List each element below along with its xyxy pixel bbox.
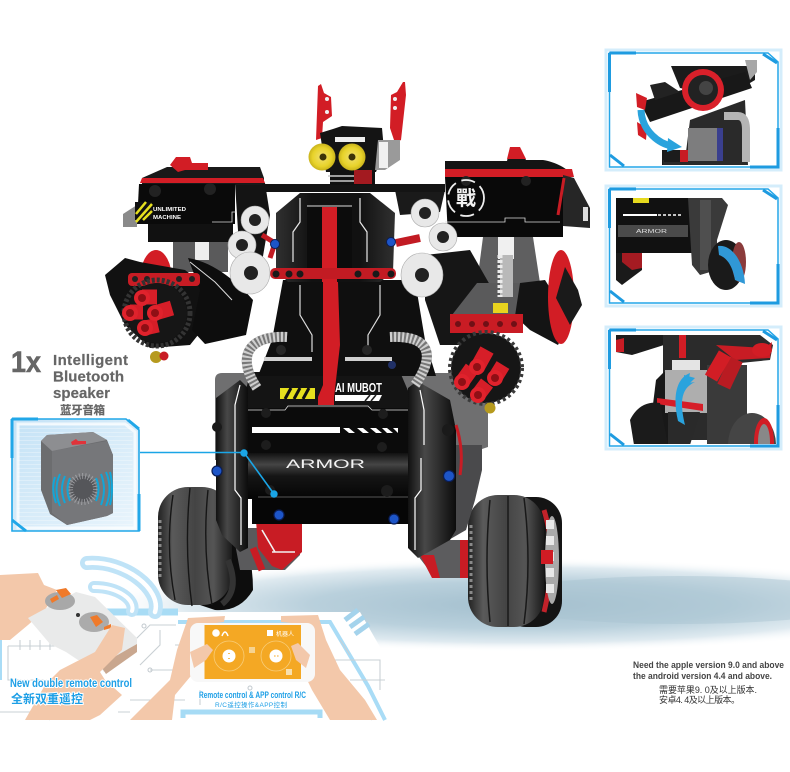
callout line	[140, 450, 277, 497]
text: AI MUBOT: AI MUBOT	[335, 381, 382, 395]
right hand	[281, 615, 377, 720]
yellow eyes	[308, 144, 366, 170]
robot body	[215, 372, 488, 578]
grey rear plate	[215, 373, 488, 460]
left arm gun	[105, 242, 253, 363]
red barrels	[130, 297, 172, 328]
text: new double remote control: 全新双重遥控	[11, 691, 83, 706]
hazard stripes	[280, 388, 315, 399]
lower hand	[25, 625, 125, 720]
underside mechanism right	[415, 540, 468, 578]
text: Intelligent Bluetooth speaker: Intelligent	[53, 352, 128, 369]
corrugated hoses	[247, 337, 427, 388]
text: remote control and app control: Remote control & APP control R/C	[199, 690, 306, 701]
text: new double remote control	[10, 676, 132, 706]
arrow	[675, 373, 695, 425]
icon: wifi arcs	[87, 563, 156, 612]
text: Intelligent Bluetooth speaker: speaker	[53, 385, 110, 402]
lower torso	[258, 280, 436, 376]
text: UNLIMITED MACHINE: MACHINE	[153, 215, 181, 221]
text: Intelligent Bluetooth speaker: 蓝牙音箱	[60, 403, 105, 417]
thumbs	[190, 644, 213, 668]
screen	[204, 625, 301, 679]
emblem: 戰	[456, 187, 476, 210]
text: version requirements: 需要苹果9. 0及以上版本.	[659, 684, 757, 695]
circuit board background	[0, 610, 392, 720]
left shoulder	[123, 157, 270, 262]
text: Intelligent Bluetooth speaker: Bluetooth	[53, 368, 124, 386]
text: UNLIMITED MACHINE	[153, 207, 186, 221]
icon: remote control in hands	[0, 573, 137, 720]
text: 1x label: 1x	[11, 346, 41, 379]
panel: speaker callout	[12, 419, 139, 531]
panel: detail middle	[606, 186, 781, 306]
right wheel	[468, 495, 562, 627]
text: version requirements: 安卓4. 4及以上版本。	[659, 694, 740, 705]
head with horns	[308, 82, 406, 185]
left hand	[130, 616, 225, 720]
red barrels	[462, 350, 503, 395]
underside mechanism left	[232, 522, 300, 570]
hazard stripes	[135, 202, 152, 222]
top cap	[245, 372, 412, 415]
blue screws	[212, 466, 454, 524]
right side panel	[408, 381, 456, 558]
screen: 机器人	[276, 630, 294, 638]
text: UNLIMITED MACHINE: UNLIMITED	[153, 207, 186, 213]
shoulder bar	[262, 184, 445, 192]
left wheel	[158, 487, 253, 610]
lower bar	[252, 497, 408, 524]
red horns	[316, 84, 332, 140]
remote body	[28, 592, 137, 672]
text: new double remote control: New double remote control	[10, 676, 132, 690]
right arm and gun	[395, 190, 582, 414]
body decals	[212, 381, 454, 497]
text: Intelligent Bluetooth speaker	[53, 352, 128, 417]
text: ARMOR: ARMOR	[286, 457, 366, 471]
upper torso	[270, 193, 396, 282]
upper plate	[245, 408, 408, 456]
left side panel	[216, 380, 248, 552]
emblem	[448, 180, 484, 216]
upper left hand	[0, 573, 57, 640]
right shoulder	[445, 147, 590, 237]
drum	[245, 453, 408, 499]
text: remote control and app control	[199, 690, 306, 709]
icon: speaker	[41, 432, 113, 525]
arrow	[641, 110, 672, 146]
red centre stripe	[318, 282, 340, 405]
text: version requirements	[633, 660, 784, 705]
icon: phone in hands	[130, 615, 377, 720]
phone body	[190, 623, 315, 682]
panel: detail middle: ARMOR	[636, 229, 668, 235]
white pulleys	[228, 199, 457, 297]
text: version requirements: the android version 4.4 and above.	[633, 671, 772, 682]
text: remote control and app control: R/C遥控操作&APP控制	[215, 700, 288, 709]
floor reflection	[143, 563, 790, 648]
panel: detail top	[606, 50, 781, 180]
panel: detail bottom	[604, 326, 782, 450]
